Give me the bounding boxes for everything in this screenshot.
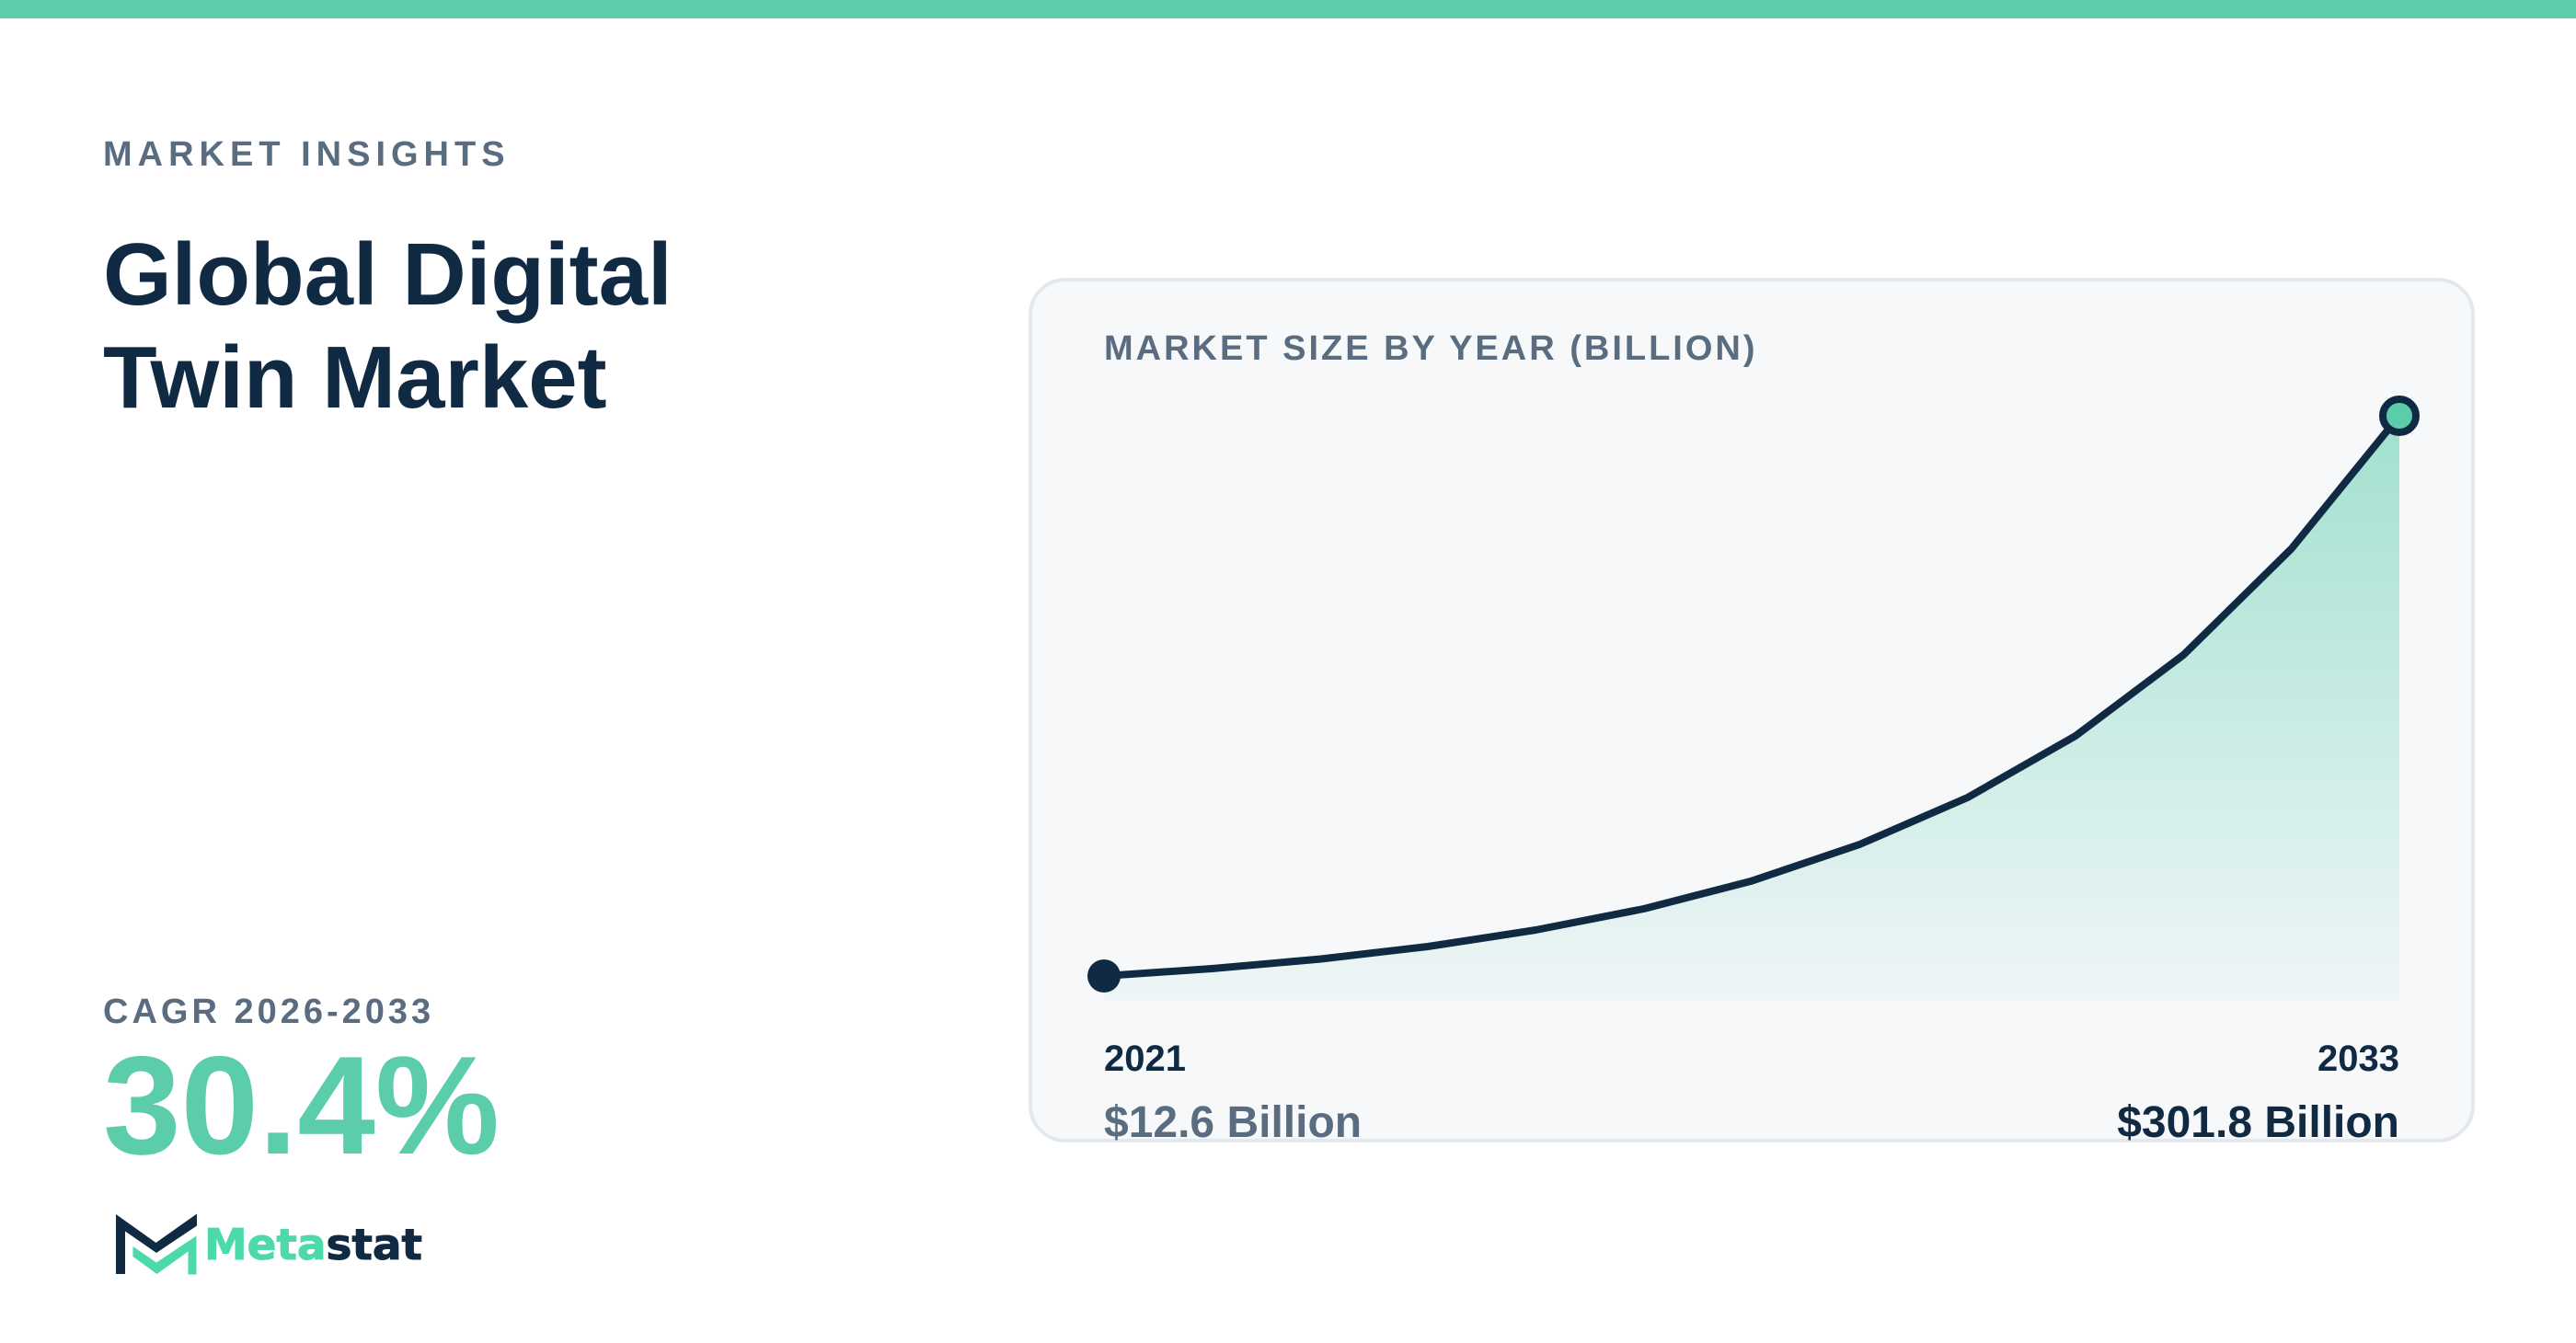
start value: $12.6 Billion <box>1104 1098 1362 1147</box>
panel: market size chart card <box>1029 278 2475 1142</box>
start point marker <box>1087 959 1121 993</box>
logo mark <box>116 1214 197 1275</box>
title: Twin Market <box>103 328 607 427</box>
eyebrow: market insights: MARKET INSIGHTS <box>103 135 511 174</box>
logo wordmark: Metastat <box>204 1220 422 1269</box>
end point marker <box>2383 399 2416 432</box>
end year label: 2033 <box>2317 1039 2399 1079</box>
area fill <box>1104 416 2399 1001</box>
title <box>103 225 673 427</box>
card heading: MARKET SIZE BY YEAR (BILLION) <box>1104 329 1758 368</box>
CAGR label: CAGR 2026-2033 <box>103 993 434 1031</box>
logo: Metastat <box>116 1214 422 1275</box>
start year label: 2021 <box>1104 1039 1186 1079</box>
title: Global Digital <box>103 225 673 324</box>
area line chart <box>1087 396 2420 997</box>
CAGR value: 30.4% <box>103 1027 500 1184</box>
top accent bar <box>0 0 2576 18</box>
panel: CAGR <box>103 993 500 1184</box>
growth line <box>1104 416 2399 976</box>
end value: $301.8 Billion <box>2117 1098 2399 1147</box>
